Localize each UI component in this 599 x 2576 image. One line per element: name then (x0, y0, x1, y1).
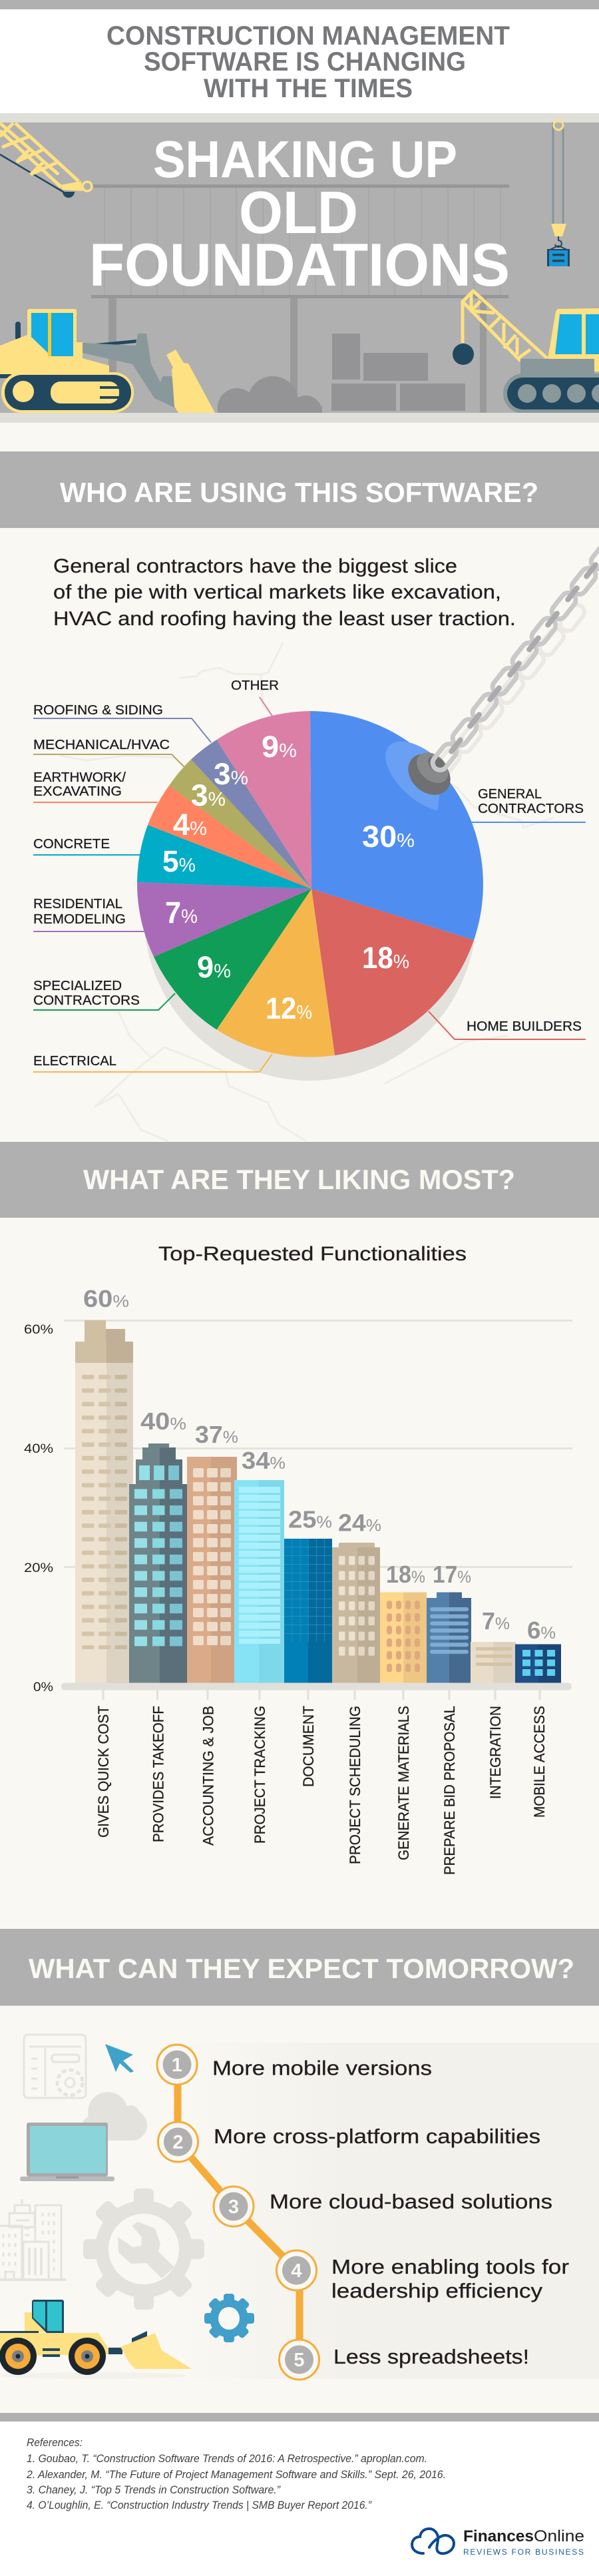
rotated category labels: PREPARE BID PROPOSAL (441, 1706, 458, 1875)
building: project tracking 34% (234, 1480, 284, 1683)
pie label: specialized contractors: CONTRACTORS (33, 993, 140, 1008)
references: References: (27, 2436, 83, 2449)
rubble pile (218, 376, 322, 413)
pie label: home builders (429, 1011, 586, 1039)
value labels: 60% (83, 1285, 129, 1312)
value labels: 6% (527, 1617, 556, 1644)
step 4: 4 (291, 2260, 302, 2282)
pie label: specialized contractors: SPECIALIZED (33, 979, 122, 993)
pie label: other: OTHER (231, 678, 279, 693)
title (106, 21, 510, 103)
pie label: residential remodeling (33, 897, 145, 931)
step 2 (158, 2122, 540, 2162)
pie section intro text (53, 555, 516, 630)
icon: software window (24, 2035, 86, 2098)
wrecking ball chain (400, 540, 599, 803)
rotated category labels: GENERATE MATERIALS (395, 1706, 412, 1860)
pie label: home builders: HOME BUILDERS (467, 1019, 582, 1034)
pie label: general contractors: GENERAL (478, 787, 542, 802)
pie label: mechanical hvac (33, 738, 184, 767)
timeline connectors (178, 2065, 300, 2360)
rotated category labels: PROJECT TRACKING (252, 1706, 268, 1844)
section heading: what are they liking most: WHAT ARE THEY LIKING MOST? (83, 1164, 515, 1195)
building: gives quick cost 60% (75, 1320, 133, 1683)
pie label: earthwork excavating: EARTHWORK/ (33, 770, 126, 785)
percent labels: 18% (362, 941, 409, 975)
concrete blocks (331, 334, 465, 411)
rotated category labels: INTEGRATION (487, 1706, 504, 1799)
section heading: what are they liking most (0, 1142, 599, 1218)
step 1: More mobile versions (212, 2056, 432, 2080)
step 4: More enabling tools for (331, 2255, 569, 2278)
hero heading: SHAKING UP (153, 130, 457, 188)
pie label: earthwork excavating (33, 770, 158, 802)
ground cracks (60, 643, 554, 1141)
title: WITH THE TIMES (204, 74, 413, 103)
top bar (0, 0, 599, 9)
icon: cloud (81, 2092, 147, 2141)
rotated category labels: GIVES QUICK COST (95, 1706, 112, 1838)
hero heading: OLD (239, 180, 358, 246)
slice: roofing 3% (191, 740, 311, 889)
bar chart: skyscrapers (24, 1285, 572, 1875)
pie label: other (231, 678, 279, 716)
pie chart (137, 711, 483, 1081)
icon: small blue gear (204, 2294, 254, 2342)
pie section intro text: HVAC and roofing having the least user traction. (53, 608, 516, 630)
section heading: what can they expect tomorrow (0, 1929, 599, 2005)
value labels: 7% (482, 1607, 510, 1635)
value labels: 40% (140, 1408, 186, 1435)
step 1 (157, 2045, 432, 2085)
step 5: 5 (294, 2350, 305, 2371)
chain shadow (433, 602, 587, 778)
rotated category labels: ACCOUNTING & JOB (200, 1706, 217, 1846)
step 3 (214, 2187, 552, 2226)
gridlines and y axis: 0% (33, 1680, 53, 1694)
pie label: roofing and siding: ROOFING & SIDING (33, 703, 163, 718)
percent labels (162, 730, 415, 1025)
bulldozer (0, 309, 215, 413)
step 4: leadership efficiency (331, 2279, 543, 2302)
pie label: residential remodeling: REMODELING (33, 912, 126, 927)
pie label: electrical: ELECTRICAL (33, 1054, 116, 1069)
building frame (91, 184, 509, 413)
step 3: 3 (228, 2196, 239, 2218)
pie label: electrical (33, 1054, 272, 1072)
hero heading (89, 130, 510, 299)
value labels: 24% (338, 1509, 381, 1537)
building: generate materials 18% (380, 1593, 427, 1683)
building: document 25% (284, 1539, 332, 1683)
value labels: 25% (288, 1506, 332, 1533)
percent labels: 3% (214, 757, 248, 791)
logo: financesonline: Online (534, 2527, 584, 2545)
wrecking crane right (453, 291, 599, 413)
gridlines and y axis: 20% (24, 1561, 53, 1575)
pie label: mechanical hvac: MECHANICAL/HVAC (33, 738, 170, 752)
title: SOFTWARE IS CHANGING (144, 47, 466, 77)
percent labels: 30% (362, 820, 415, 854)
building: prepare bid proposal 17% (427, 1593, 471, 1683)
ball highlight (385, 742, 439, 811)
building: accounting and job 37% (187, 1457, 237, 1683)
logo: financesonline: REVIEWS FOR BUSINESS (463, 2547, 584, 2557)
value labels: 34% (242, 1447, 286, 1474)
gridlines and y axis (24, 1320, 572, 1694)
section heading: who are using this software: WHO ARE USING THIS SOFTWARE? (60, 477, 538, 508)
icon: large gear with wrench (83, 2189, 204, 2310)
pie section intro text: General contractors have the biggest slice (53, 555, 457, 577)
slice: home builders 18% (311, 889, 474, 1055)
gridlines and y axis: 40% (24, 1442, 53, 1456)
rotated category labels: PROJECT SCHEDULING (347, 1706, 363, 1864)
percent labels: 7% (165, 896, 198, 929)
step 2: 2 (172, 2132, 184, 2153)
trends background panel (176, 2043, 599, 2379)
slice: electrical 12% (217, 889, 335, 1057)
references: 3. Chaney, J. “Top 5 Trends in Construction Software.” (27, 2483, 281, 2496)
pie label: concrete: CONCRETE (33, 837, 110, 852)
slice: mechanical 3% (169, 760, 311, 889)
value labels: 18% (386, 1561, 425, 1588)
slice: other 9% (217, 711, 311, 889)
percent labels: 9% (262, 730, 297, 764)
slice: residential remodeling 7% (137, 882, 311, 957)
icon: city buildings outline (0, 2199, 66, 2280)
references: 1. Goubao, T. “Construction Software Trends of 2016: A Retrospective.” aproplan.com. (27, 2452, 427, 2465)
pie label: specialized contractors (33, 979, 175, 1010)
pie section intro text: of the pie with vertical markets like excavation, (53, 581, 501, 603)
baseline and ticks (61, 1683, 572, 1700)
logo: financesonline: Finances (463, 2527, 534, 2545)
rotated category labels: PROVIDES TAKEOFF (150, 1706, 166, 1842)
gridlines and y axis: 60% (24, 1323, 53, 1337)
percent labels: 4% (173, 808, 207, 842)
rotated category labels (95, 1706, 548, 1875)
building: mobile access 6% (515, 1645, 561, 1683)
references (26, 2436, 446, 2511)
icon: front loader (0, 2300, 192, 2379)
building: integration 7% (471, 1642, 516, 1683)
title: CONSTRUCTION MANAGEMENT (106, 21, 510, 51)
ball connector (400, 746, 459, 803)
building: provides takeoff 40% (129, 1443, 187, 1683)
chain cross links (448, 561, 599, 755)
building: project scheduling 24% (332, 1543, 380, 1683)
value labels: 17% (433, 1561, 471, 1588)
section heading: who are using this software (0, 451, 599, 528)
pie label: residential remodeling: RESIDENTIAL (33, 897, 122, 911)
step 5 (280, 2340, 529, 2380)
step 2: More cross-platform capabilities (214, 2125, 540, 2148)
pie label: roofing and siding (33, 703, 211, 742)
rotated category labels: MOBILE ACCESS (531, 1706, 548, 1818)
value labels (83, 1285, 556, 1644)
chart title: Top-Requested Functionalities (158, 1243, 467, 1265)
percent labels: 3% (191, 778, 226, 812)
hero panel: construction site (0, 113, 599, 429)
slice: general contractors 30% (310, 711, 483, 940)
logo: financesonline (412, 2527, 584, 2557)
slice: earthwork 4% (148, 786, 311, 889)
references: 4. O’Loughlin, E. “Construction Industry Trends | SMB Buyer Report 2016.” (27, 2499, 372, 2511)
pie label: general contractors (471, 787, 586, 822)
title panel (0, 9, 599, 113)
step 3: More cloud-based solutions (270, 2190, 552, 2213)
section heading: what can they expect tomorrow: WHAT CAN THEY EXPECT TOMORROW? (29, 1953, 574, 1984)
percent labels: 12% (266, 991, 312, 1025)
icon: cursor arrow (105, 2044, 134, 2073)
pie label: earthwork excavating: EXCAVATING (33, 784, 122, 799)
step 5: Less spreadsheets! (333, 2345, 529, 2368)
slice: concrete 5% (137, 825, 311, 889)
step 1: 1 (172, 2055, 182, 2076)
rotated category labels: DOCUMENT (300, 1706, 317, 1787)
hero heading: FOUNDATIONS (89, 232, 510, 299)
hook and cargo top right (547, 121, 570, 266)
chain links (430, 540, 599, 773)
pie label: general contractors: CONTRACTORS (478, 802, 584, 816)
value labels: 37% (195, 1421, 238, 1448)
step 4 (277, 2250, 569, 2302)
icon: laptop (20, 2123, 114, 2181)
references: 2. Alexander, M. “The Future of Project Management Software and Skills.” Sept. 26, 2016. (26, 2468, 446, 2481)
slice: specialized contractors 9% (154, 889, 311, 1029)
footer panel (0, 2413, 599, 2576)
crane top left (0, 123, 92, 198)
percent labels: 9% (197, 950, 231, 984)
percent labels: 5% (162, 844, 196, 878)
